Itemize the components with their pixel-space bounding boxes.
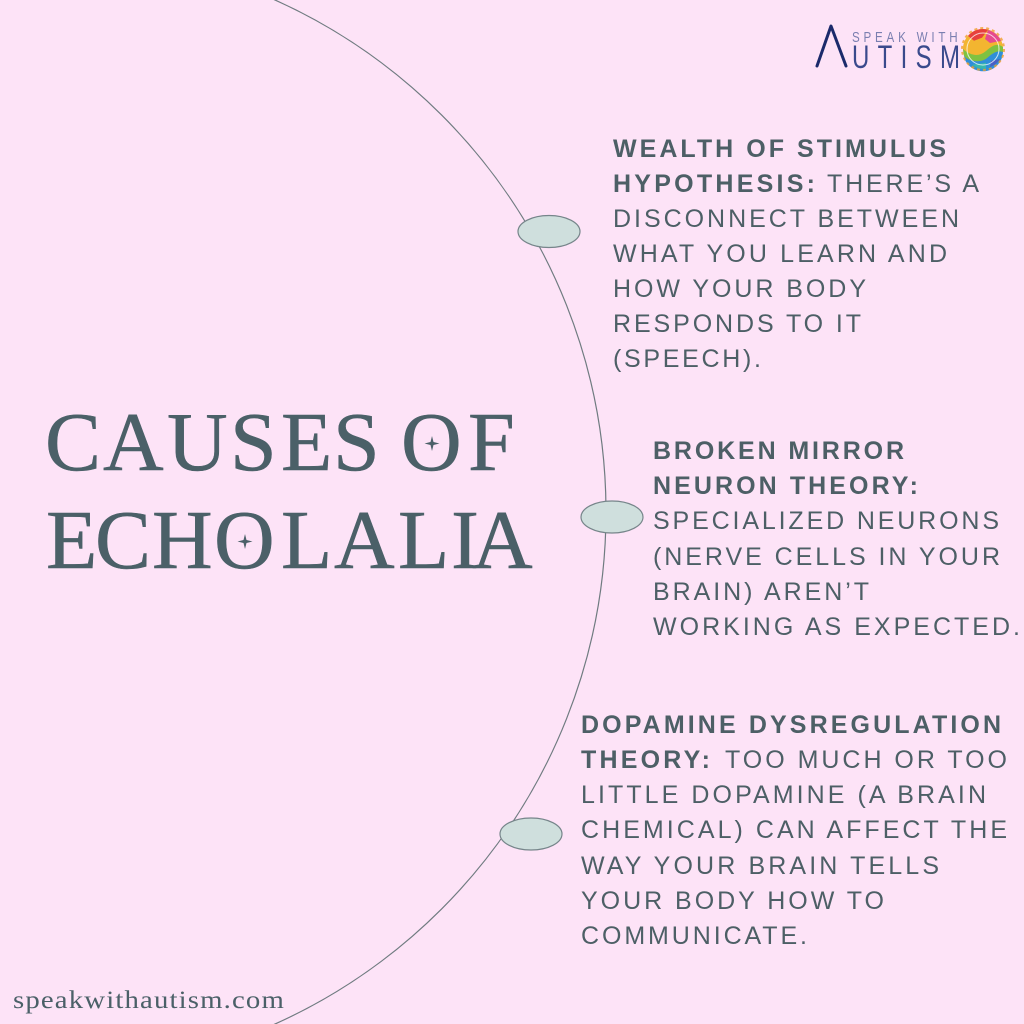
text block: wealth of stimulus hypothesis: WEALTH OF STIMULUS — [613, 135, 946, 163]
text block: wealth of stimulus hypothesis: WHAT YOU LEARN AND — [613, 240, 947, 268]
text block: broken mirror neuron theory: WORKING AS EXPECTED. — [653, 613, 1020, 641]
node 2 — [581, 501, 643, 533]
text block: wealth of stimulus hypothesis: HOW YOUR BODY — [613, 275, 866, 303]
text block: wealth of stimulus hypothesis — [613, 135, 979, 373]
node 3 — [500, 818, 562, 850]
text block: dopamine dysregulation theory: TOO MUCH OR TOO — [725, 746, 1007, 774]
text block: dopamine dysregulation theory: THEORY: — [581, 746, 710, 774]
title: ECHOLALIA — [46, 494, 533, 587]
text block: wealth of stimulus hypothesis: THERE’S A — [827, 170, 979, 198]
text block: wealth of stimulus hypothesis: RESPONDS TO IT — [613, 310, 861, 338]
logo: UTISM — [852, 39, 960, 75]
text block: wealth of stimulus hypothesis: DISCONNECT BETWEEN — [613, 205, 959, 233]
text block: broken mirror neuron theory: SPECIALIZED NEURONS — [653, 507, 999, 535]
text block: broken mirror neuron theory — [653, 437, 1020, 641]
text block: dopamine dysregulation theory: LITTLE DOPAMINE (A BRAIN — [581, 781, 986, 809]
arc timeline — [0, 0, 606, 1024]
text block: dopamine dysregulation theory: YOUR BODY HOW TO — [581, 887, 884, 915]
text block: wealth of stimulus hypothesis: HYPOTHESIS: — [613, 170, 815, 198]
title: CAUSES OF — [45, 396, 515, 489]
text block: dopamine dysregulation theory: CHEMICAL) CAN AFFECT THE — [581, 816, 1007, 844]
text block: dopamine dysregulation theory — [581, 711, 1007, 950]
title — [45, 396, 533, 587]
text block: broken mirror neuron theory: (NERVE CELLS IN YOUR — [653, 543, 1000, 571]
text block: broken mirror neuron theory: BRAIN) AREN’T — [653, 578, 869, 606]
text block: dopamine dysregulation theory: DOPAMINE DYSREGULATION — [581, 711, 1001, 739]
text block: dopamine dysregulation theory: WAY YOUR BRAIN TELLS — [581, 852, 939, 880]
logo: SPEAK WITH — [852, 29, 958, 45]
text block: wealth of stimulus hypothesis: (SPEECH). — [613, 345, 761, 373]
node 1 — [518, 216, 580, 248]
logo — [817, 26, 1004, 75]
text block: broken mirror neuron theory: BROKEN MIRROR — [653, 437, 904, 465]
icon: rainbow puzzle globe — [962, 28, 1004, 71]
website url: speakwithautism.com — [13, 987, 285, 1014]
text block: broken mirror neuron theory: NEURON THEORY: — [653, 472, 918, 500]
text block: dopamine dysregulation theory: COMMUNICATE. — [581, 922, 807, 950]
